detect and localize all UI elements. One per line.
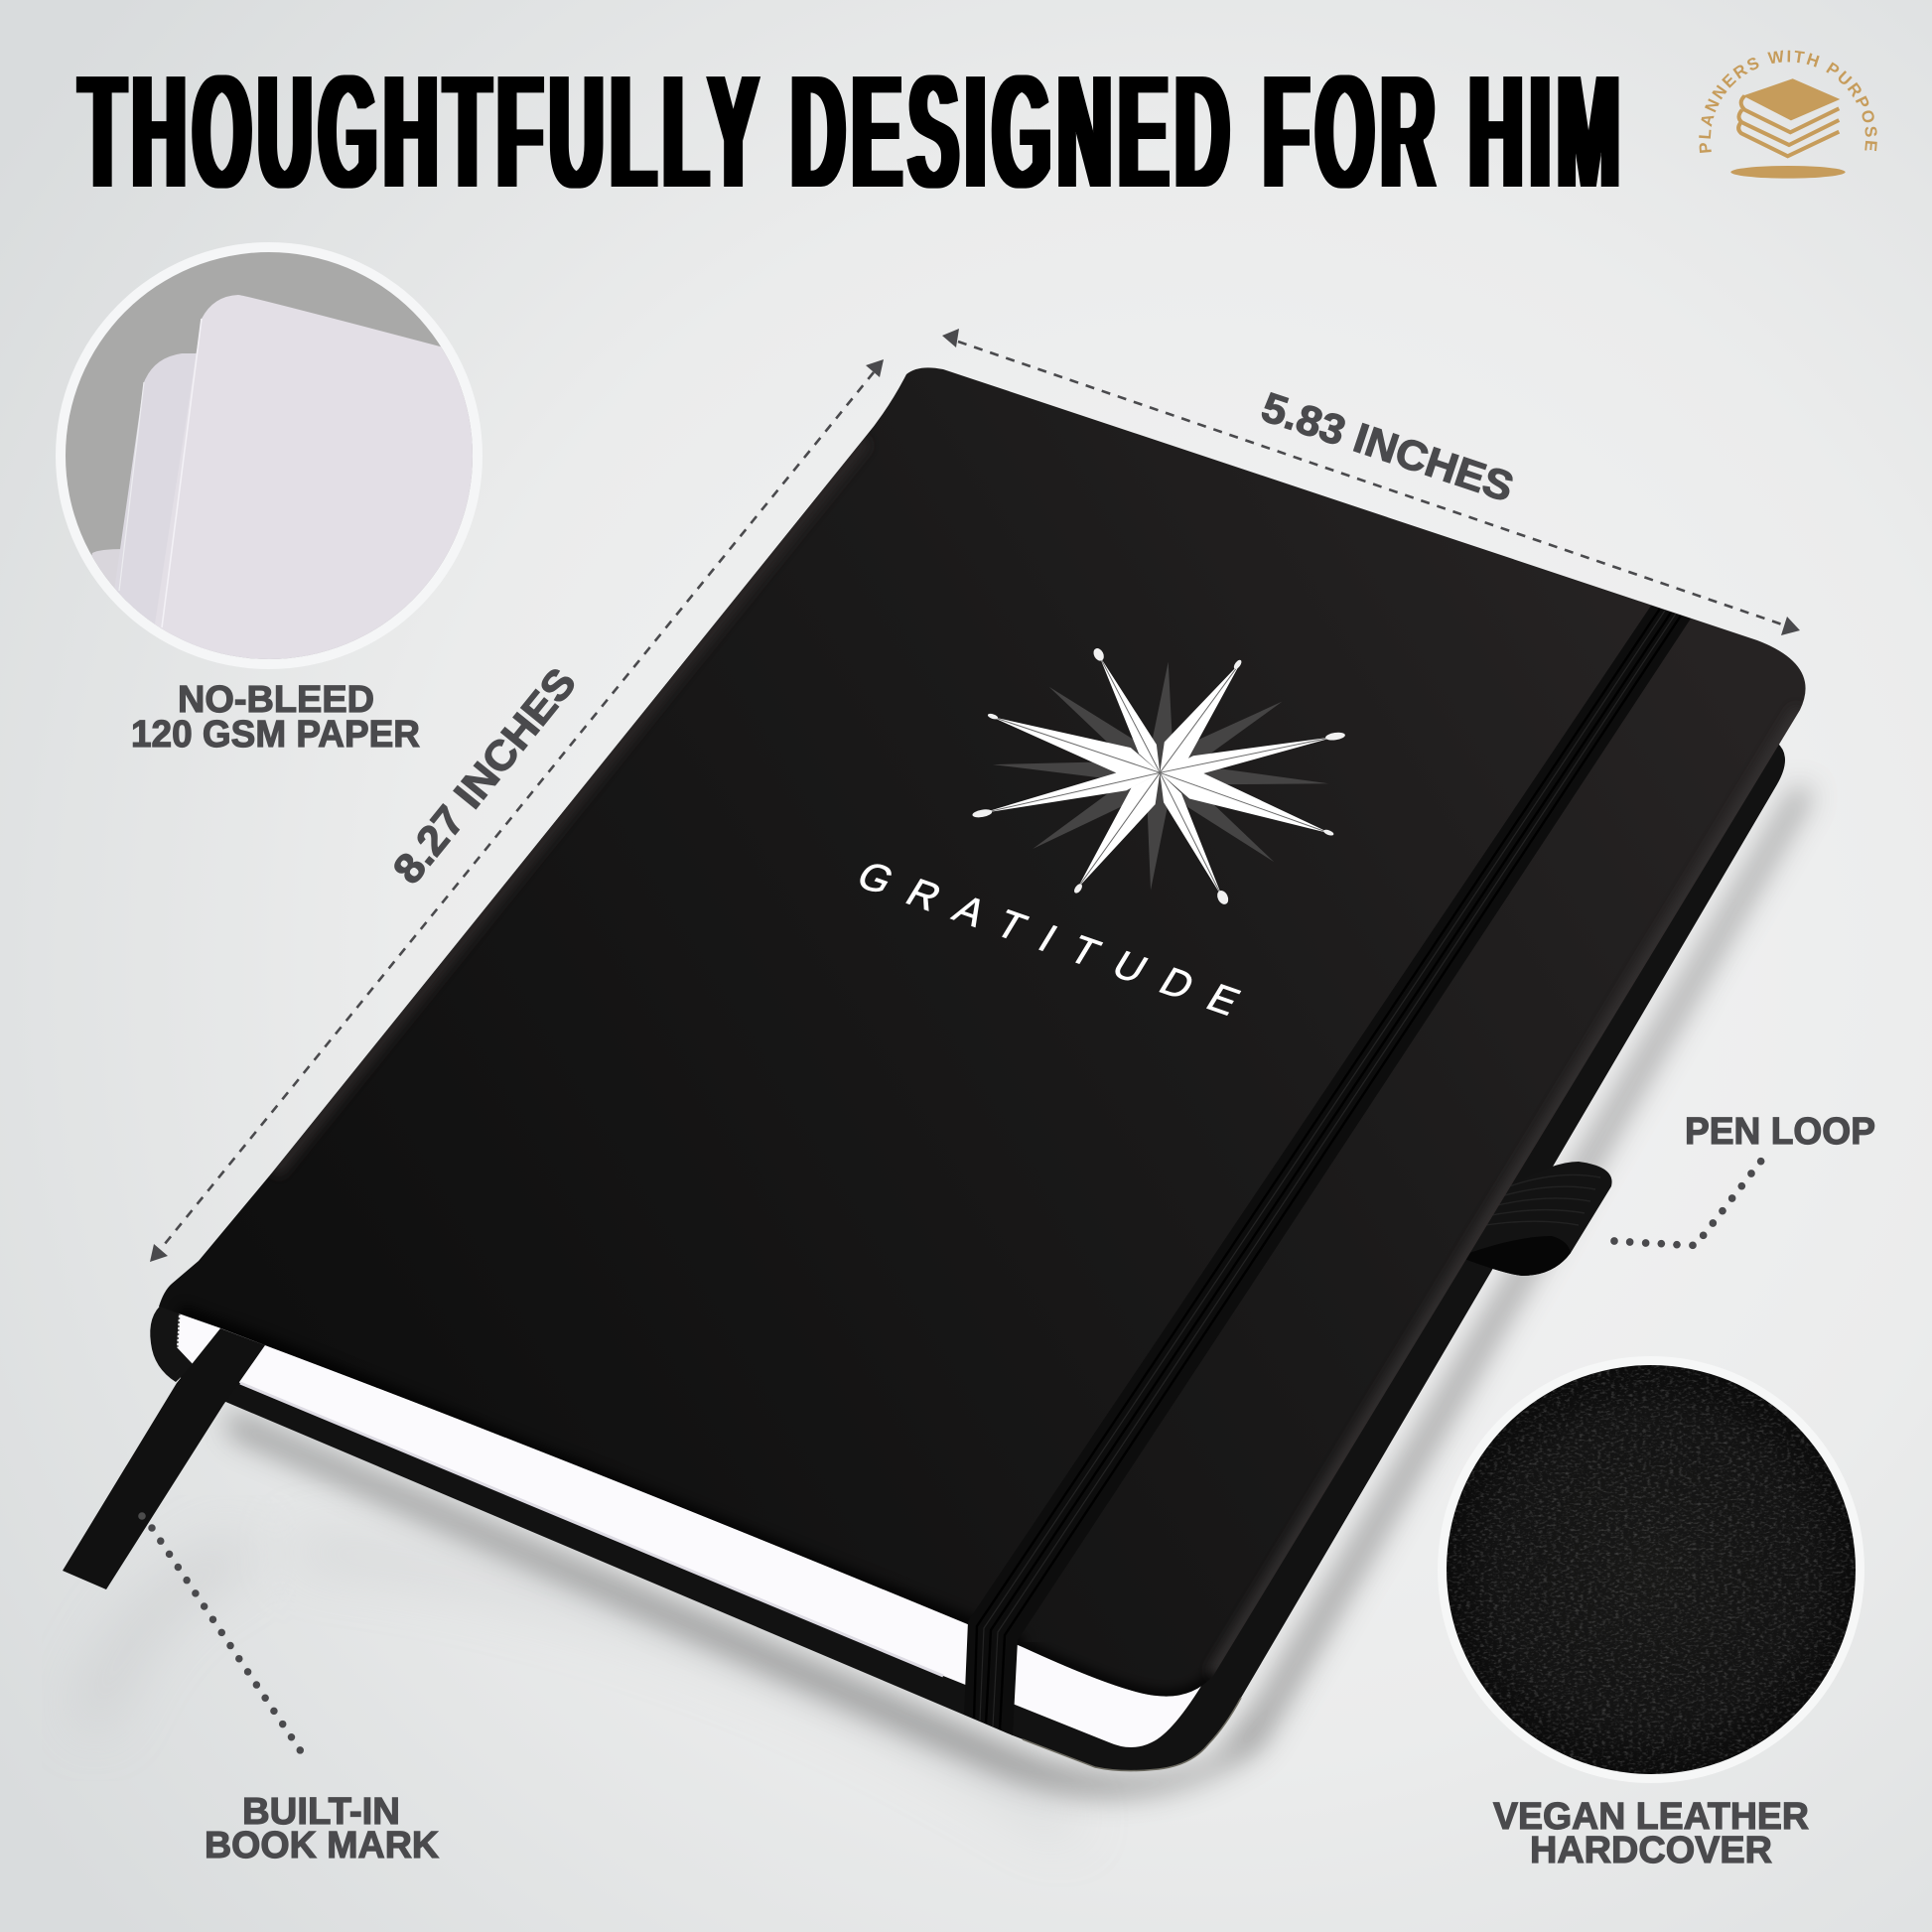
elastic band <box>964 606 1691 1735</box>
floor shadows <box>89 1549 1072 1827</box>
leather detail circle <box>1438 1356 1864 1783</box>
logo arc text: PLANNERS WITH PURPOSE <box>1699 50 1877 153</box>
width label: 5.83 INCHES <box>1256 383 1519 510</box>
ribbon bookmark <box>63 1328 265 1589</box>
leader: bookmark dots <box>138 1512 309 1763</box>
bookmark label: BUILT-IN <box>242 1791 400 1833</box>
bookmark label: BOOK MARK <box>205 1825 440 1866</box>
arrow: width dimension <box>942 329 1800 635</box>
icon: brand logo <box>1699 50 1877 179</box>
leather label: HARDCOVER <box>1530 1830 1772 1871</box>
grey rays <box>992 661 1329 891</box>
compass star emblem <box>972 646 1345 906</box>
height label: 8.27 INCHES <box>383 659 585 893</box>
white rays <box>979 650 1339 902</box>
leader: pen loop dots <box>1610 1158 1764 1249</box>
leather label <box>1493 1796 1809 1871</box>
spine end <box>150 1303 194 1382</box>
bookmark label <box>205 1791 440 1866</box>
paper label: 120 GSM PAPER <box>131 714 420 756</box>
pages block <box>177 1291 1206 1747</box>
back cover edge highlight <box>1023 1698 1241 1771</box>
cover title: GRATITUDE <box>849 853 1248 1024</box>
back cover <box>177 743 1785 1771</box>
front cover <box>159 367 1806 1697</box>
leather label: VEGAN LEATHER <box>1493 1796 1809 1838</box>
ray centre lines <box>981 654 1337 898</box>
notebook <box>63 367 1806 1771</box>
pen loop label: PEN LOOP <box>1685 1111 1875 1153</box>
pen loop <box>1464 1162 1612 1276</box>
book shadow <box>228 784 1812 1797</box>
logo stacked books <box>1730 79 1846 179</box>
paper label: NO-BLEED <box>178 679 374 721</box>
paper detail circle <box>56 242 483 669</box>
panel: vegan leather callout <box>1438 1356 1864 1871</box>
paper label <box>131 679 420 756</box>
panel: no-bleed paper callout <box>56 242 483 749</box>
ray tips <box>972 646 1345 906</box>
arrow: height dimension <box>150 359 884 1262</box>
